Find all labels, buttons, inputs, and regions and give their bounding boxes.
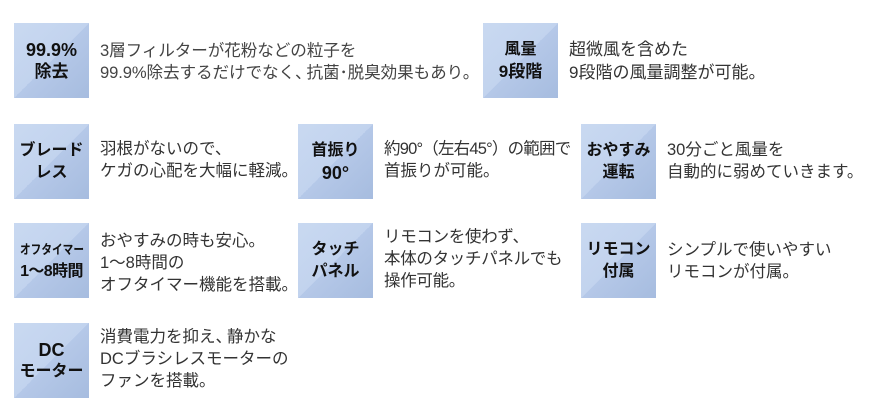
description: 約90°（左右45°）の範囲で bbox=[384, 140, 570, 158]
description bbox=[384, 140, 570, 180]
description bbox=[100, 328, 289, 390]
badge: DC モーター: DC bbox=[38, 340, 64, 360]
feature: DC motor bbox=[14, 323, 289, 398]
description: ファンを搭載。 bbox=[100, 372, 216, 390]
badge: DC モーター: モーター bbox=[19, 363, 84, 380]
badge: ブレードレス bbox=[14, 124, 89, 199]
description bbox=[100, 140, 298, 180]
badge: おやすみ運転 bbox=[581, 124, 656, 199]
badge: リモコン付属: 付属 bbox=[602, 263, 634, 280]
description: 超微風を含めた bbox=[569, 40, 688, 59]
description bbox=[569, 40, 765, 82]
description bbox=[667, 240, 832, 281]
description: リモコンが付属。 bbox=[667, 263, 799, 281]
description: リモコンを使わず、 bbox=[384, 228, 529, 246]
badge: 99.9% 除去: 99.9% bbox=[26, 40, 77, 60]
feature: remote included bbox=[581, 223, 832, 298]
badge: 首振り 90° bbox=[298, 124, 373, 199]
feature: 99.9% removal bbox=[14, 23, 479, 98]
feature: off timer bbox=[14, 223, 298, 298]
description: 本体のタッチパネルでも bbox=[384, 250, 562, 268]
badge: 首振り 90°: 首振り bbox=[311, 142, 360, 159]
badge: 風量 9段階: 風量 bbox=[504, 41, 536, 58]
badge: 風量 9段階 bbox=[483, 23, 558, 98]
description: 30分ごと風量を bbox=[667, 141, 784, 159]
description bbox=[667, 140, 863, 181]
badge: オフタイマー 1~8時間: 1～8時間 bbox=[20, 263, 83, 280]
badge: ブレードレス: レス bbox=[35, 164, 68, 181]
badge: 99.9% 除去 bbox=[14, 23, 89, 98]
description bbox=[384, 228, 562, 290]
feature: bladeless bbox=[14, 124, 298, 199]
badge: タッチパネル: パネル bbox=[311, 263, 360, 280]
description: 羽根がないので、 bbox=[100, 140, 231, 158]
description: DCブラシレスモーターの bbox=[100, 350, 289, 368]
description: 自動的に弱めていきます。 bbox=[667, 163, 863, 181]
badge: 99.9% 除去: 除去 bbox=[34, 62, 68, 81]
feature: 90 degree oscillation bbox=[298, 124, 570, 199]
badge: タッチパネル: タッチ bbox=[311, 241, 360, 258]
description bbox=[100, 232, 298, 294]
feature: touch panel bbox=[298, 223, 562, 298]
description: オフタイマー機能を搭載。 bbox=[100, 276, 298, 294]
feature: sleep mode bbox=[581, 124, 863, 199]
description: ケガの心配を大幅に軽減。 bbox=[100, 162, 298, 180]
badge: 風量 9段階: 9段階 bbox=[499, 62, 542, 81]
badge: オフタイマー 1~8時間: オフタイマー bbox=[20, 242, 83, 257]
description: 操作可能。 bbox=[384, 272, 465, 290]
description: 99.9%除去するだけでなく、抗菌･脱臭効果もあり。 bbox=[100, 63, 479, 82]
badge: タッチパネル bbox=[298, 223, 373, 298]
feature: 9 airflow levels bbox=[483, 23, 765, 98]
badge: 首振り 90°: 90° bbox=[322, 163, 349, 183]
badge: おやすみ運転: おやすみ bbox=[586, 142, 650, 159]
description: おやすみの時も安心。 bbox=[100, 232, 265, 250]
description: シンプルで使いやすい bbox=[667, 241, 832, 259]
badge: ブレードレス: ブレード bbox=[19, 142, 84, 159]
description: 消費電力を抑え、静かな bbox=[100, 328, 276, 346]
badge: おやすみ運転: 運転 bbox=[602, 164, 634, 181]
badge: リモコン付属 bbox=[581, 223, 656, 298]
description: 9段階の風量調整が可能。 bbox=[569, 63, 765, 82]
description: 1～8時間の bbox=[100, 254, 184, 272]
description: 3層フィルターが花粉などの粒子を bbox=[100, 41, 356, 60]
badge: オフタイマー 1~8時間 bbox=[14, 223, 89, 298]
description bbox=[100, 41, 479, 82]
badge: リモコン付属: リモコン bbox=[586, 241, 650, 258]
description: 首振りが可能。 bbox=[384, 162, 500, 180]
badge: DC モーター bbox=[14, 323, 89, 398]
